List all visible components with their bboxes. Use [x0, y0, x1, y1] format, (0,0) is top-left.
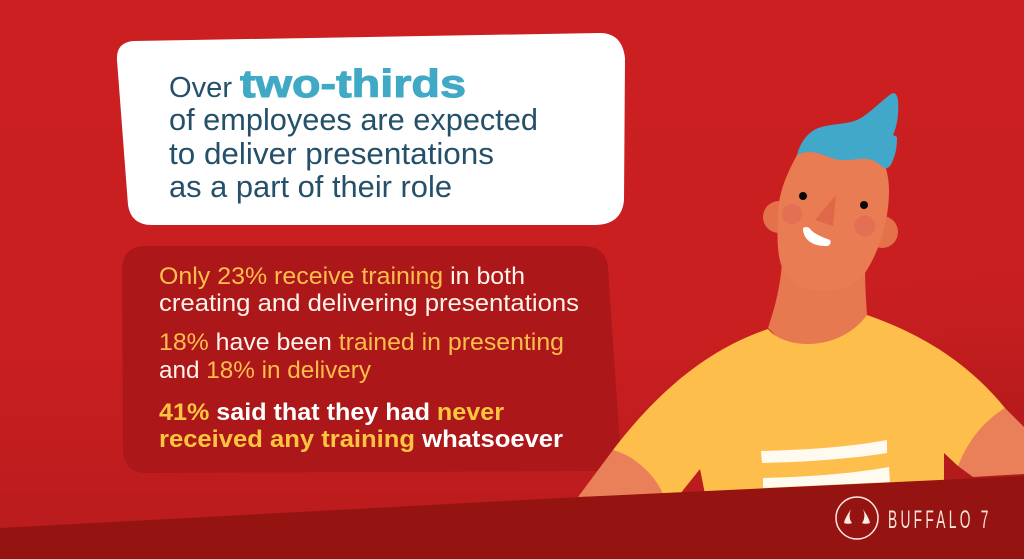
heading: over two-thirds	[169, 63, 466, 106]
face	[777, 145, 889, 291]
heading: over two-thirds: two-thirds	[240, 63, 466, 106]
statistic: only 23 percent	[159, 263, 579, 317]
smile	[803, 227, 831, 246]
headline text block	[169, 102, 538, 204]
statistic: only 23 percent: Only 23% receive training in both	[159, 263, 525, 290]
shirt stripes	[761, 440, 890, 488]
panel: training statistics	[122, 246, 620, 473]
panel: headline card	[117, 33, 625, 225]
statistic: 18 percent	[159, 329, 564, 384]
nose	[815, 195, 836, 226]
heading: over two-thirds: Over	[169, 72, 232, 104]
neck	[768, 262, 867, 350]
ears	[763, 201, 898, 248]
headline text block: as a part of their role	[169, 169, 452, 204]
left arm	[578, 450, 663, 497]
illustration: presenter character	[578, 93, 1024, 497]
cheeks	[782, 204, 876, 236]
statistic: only 23 percent: creating and delivering presentations	[159, 290, 579, 317]
headline text block: of employees are expected	[169, 102, 538, 137]
statistic: 41 percent: received any training whatsoever	[159, 426, 563, 453]
statistic: 41 percent	[159, 399, 563, 453]
logo: Buffalo 7	[836, 497, 992, 539]
right arm	[958, 408, 1024, 477]
eyes	[799, 192, 868, 209]
shirt	[613, 315, 1005, 494]
wordmark: BUFFALO 7	[888, 507, 992, 534]
hair	[797, 93, 898, 168]
footer band	[0, 476, 1024, 559]
headline text block: to deliver presentations	[169, 136, 494, 171]
statistic: 41 percent: 41% said that they had never	[159, 399, 504, 426]
icon: buffalo horns	[836, 497, 878, 539]
statistic: 18 percent: and 18% in delivery	[159, 357, 371, 384]
statistic: 18 percent: 18% have been trained in presenting	[159, 329, 564, 356]
